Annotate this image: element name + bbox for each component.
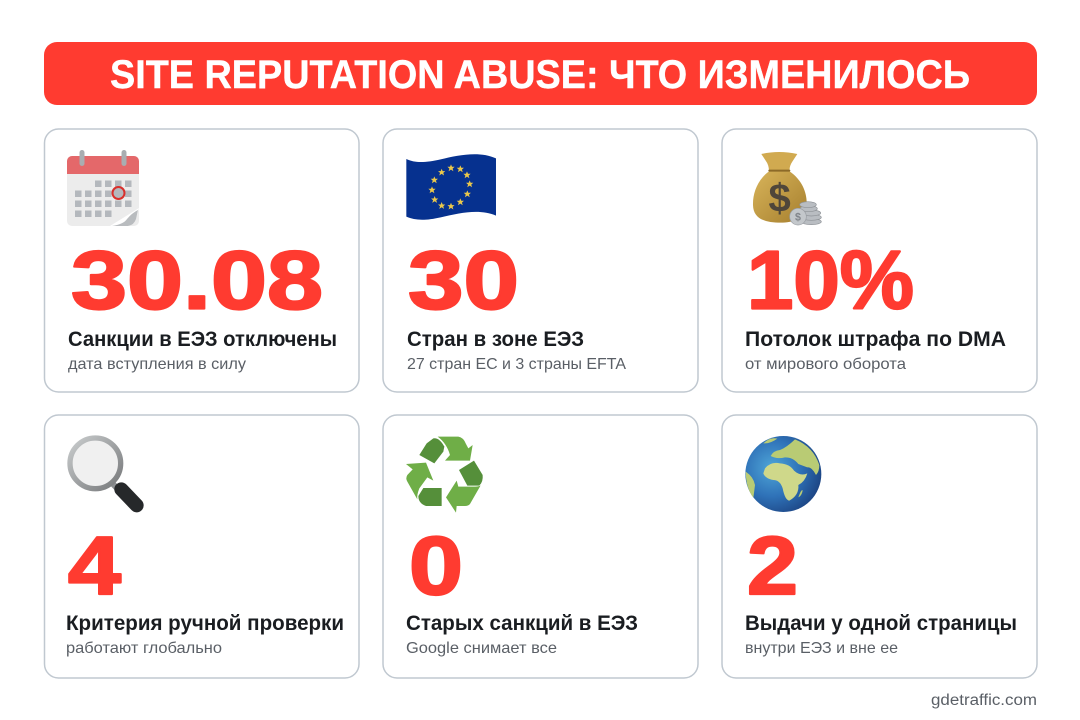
icon: money bag: $ — [795, 212, 801, 224]
card subtitle: внутри ЕЭЗ и вне ее — [745, 640, 898, 657]
card title: Критерия ручной проверки — [66, 611, 344, 635]
card subtitle: работают глобально — [66, 640, 222, 657]
icon: magnifier — [70, 438, 137, 505]
card subtitle: 27 стран ЕС и 3 страны EFTA — [407, 356, 626, 373]
card subtitle: дата вступления в силу — [68, 356, 246, 373]
big number: 10% — [747, 234, 914, 326]
big number: 30.08 — [71, 234, 323, 326]
footer source: gdetraffic.com — [931, 692, 1037, 709]
panel: date sanctions disabled — [44, 129, 359, 392]
icon: EU flag — [406, 154, 496, 220]
card subtitle: от мирового оборота — [745, 356, 906, 373]
title banner — [44, 42, 1037, 105]
big number: 4 — [68, 519, 121, 612]
icon: money bag: $ — [769, 177, 791, 221]
big number: 0 — [409, 519, 463, 612]
panel: EEA countries — [383, 129, 698, 392]
panel: DMA fine cap — [722, 129, 1037, 392]
card title: Потолок штрафа по DMA — [745, 327, 1006, 351]
icon: money bag — [753, 152, 821, 225]
card title: Санкции в ЕЭЗ отключены — [68, 327, 337, 351]
title banner: SITE REPUTATION ABUSE: ЧТО ИЗМЕНИЛОСЬ — [110, 53, 970, 97]
card title: Стран в зоне ЕЭЗ — [407, 327, 584, 351]
card subtitle: Google снимает все — [406, 640, 557, 657]
big number: 30 — [408, 234, 519, 326]
big number: 2 — [747, 519, 798, 612]
panel: old sanctions — [383, 415, 698, 678]
icon: recycling symbol — [406, 437, 483, 513]
icon: calendar — [67, 150, 139, 226]
panel: manual review criteria — [44, 415, 359, 678]
card title: Старых санкций в ЕЭЗ — [406, 611, 638, 635]
card title: Выдачи у одной страницы — [745, 611, 1017, 635]
icon: globe — [745, 436, 821, 512]
panel: two search results — [722, 415, 1037, 678]
